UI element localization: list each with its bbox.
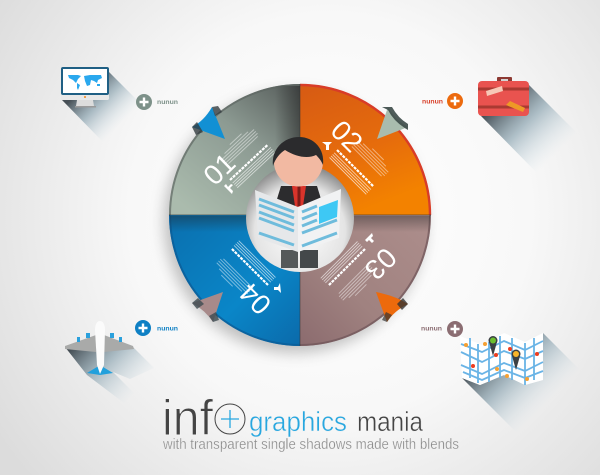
title: mania: mania xyxy=(357,406,423,437)
world map xyxy=(68,75,102,90)
panel: segment 02 orange xyxy=(300,84,431,215)
long shadow xyxy=(65,347,154,403)
suit xyxy=(277,186,321,212)
subtitle: with transparent single shadows made with blends xyxy=(162,436,459,453)
label 02: 02 xyxy=(325,114,369,158)
label 02 xyxy=(322,114,392,194)
map pin yellow xyxy=(512,350,520,370)
long shadow xyxy=(62,72,141,142)
plus button xyxy=(447,321,463,337)
icon: plus circle xyxy=(215,404,245,434)
orange segment red edge xyxy=(300,85,430,215)
panel: segment 03 mauve xyxy=(300,215,431,346)
fold arrow top-right xyxy=(377,107,408,139)
panel: segment 01 grey-green xyxy=(169,84,300,215)
icon: airplane xyxy=(65,321,134,375)
label 01: 01 xyxy=(197,147,241,191)
title: graphics: graphics xyxy=(249,406,347,437)
long shadow xyxy=(462,333,580,433)
item: monitor xyxy=(61,67,178,142)
segment dividers xyxy=(169,84,431,346)
segment fold shading xyxy=(170,86,430,232)
fold arrow bottom-left xyxy=(192,292,223,322)
label 03 xyxy=(321,233,403,304)
fold arrow bottom-right xyxy=(376,292,408,322)
long shadow xyxy=(481,85,577,173)
label: nunun xyxy=(157,99,178,106)
title: inf: inf xyxy=(162,390,213,446)
title xyxy=(162,390,459,453)
head xyxy=(273,137,323,186)
icon: monitor xyxy=(61,67,109,108)
plus button xyxy=(135,320,151,336)
item: suitcase xyxy=(422,77,577,173)
segment edge shading xyxy=(170,85,430,345)
label: nunun xyxy=(422,98,443,106)
icon: folded map xyxy=(460,333,543,385)
legs xyxy=(281,250,318,268)
label 03: 03 xyxy=(359,242,403,286)
fold arrow top-left xyxy=(192,106,225,139)
newspaper xyxy=(255,189,341,252)
icon: businessman reading newspaper xyxy=(255,137,341,268)
label 01 xyxy=(197,126,275,194)
label: nunun xyxy=(421,326,442,332)
label: nunun xyxy=(157,326,178,332)
panel: segment 04 blue xyxy=(169,215,300,346)
map pin green xyxy=(488,336,498,356)
main circle diagram xyxy=(164,84,431,353)
item: folded map xyxy=(421,321,580,433)
plus button xyxy=(136,94,152,110)
plus button xyxy=(447,93,463,109)
label 04: 04 xyxy=(233,277,277,321)
label 04 xyxy=(213,241,281,321)
centre hole xyxy=(246,164,354,272)
icon: suitcase xyxy=(478,77,529,116)
item: airplane xyxy=(65,320,178,403)
